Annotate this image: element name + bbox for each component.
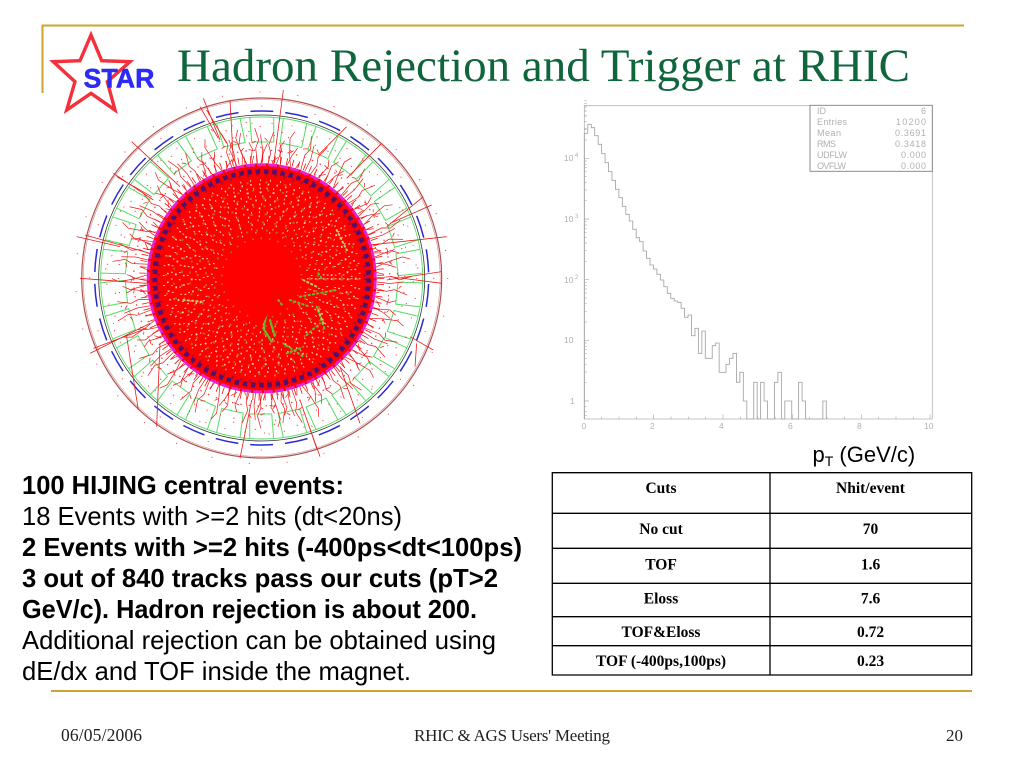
pT distribution step line <box>584 124 826 419</box>
table: cuts vs hits per event: Nhit/event <box>836 480 906 497</box>
table: cuts vs hits per event: Eloss <box>644 590 678 608</box>
table: cuts vs hits per event: TOF <box>645 556 677 574</box>
short tracks outside the disc <box>102 118 421 438</box>
header frame lines <box>42 26 964 93</box>
table: cuts vs hits per event: 1.6 <box>861 556 880 574</box>
statistics box: Mean <box>817 128 841 138</box>
y axis labels <box>564 153 579 406</box>
x axis labels <box>582 421 934 431</box>
magenta inner barrel <box>148 165 375 392</box>
text block: HIJING results <box>22 472 522 686</box>
x axis labels: 10 <box>924 421 934 431</box>
scattered hit dots <box>76 92 448 464</box>
icon: STAR logo <box>53 35 154 110</box>
statistics box: OVFLW <box>817 161 846 171</box>
blue dots ring <box>148 165 375 392</box>
table: cuts vs hits per event: 0.23 <box>857 653 884 670</box>
axis title pT: (GeV/c) <box>833 442 915 467</box>
statistics box: 0.000 <box>901 161 926 171</box>
table: cuts vs hits per event: TOF&Eloss <box>622 624 700 641</box>
text block: HIJING results: 3 out of 840 tracks pass our cuts (pT>2 <box>22 565 498 593</box>
axis title pT: p <box>812 442 825 467</box>
page number: 20 <box>946 726 963 745</box>
axes frame <box>584 106 932 419</box>
statistics box: 0.3691 <box>895 128 926 138</box>
green hit patches <box>183 230 347 357</box>
dense central core <box>241 245 289 325</box>
y axis labels: 10 <box>564 275 574 285</box>
axis title pT: T <box>825 453 834 469</box>
y axis labels: 4 <box>575 153 579 159</box>
statistics box: 6 <box>921 106 926 116</box>
y axis ticks <box>584 100 589 416</box>
table: cuts vs hits per event: No cut <box>639 521 684 538</box>
x axis labels: 4 <box>719 421 724 431</box>
statistics box <box>810 105 932 171</box>
outer magnet rings <box>82 98 442 458</box>
y axis labels: 2 <box>575 275 579 281</box>
title: Hadron Rejection and Trigger at RHIC <box>177 40 910 92</box>
long tracks crossing the rings <box>77 90 447 458</box>
y axis labels: 10 <box>564 153 574 163</box>
x axis labels: 8 <box>857 421 862 431</box>
blue segments <box>95 111 429 445</box>
footer meeting name: RHIC & AGS Users' Meeting <box>414 726 610 745</box>
table: cuts vs hits per event: Cuts <box>645 480 677 497</box>
text block: HIJING results: 2 Events with >=2 hits (-400ps<dt<100ps) <box>22 534 522 562</box>
olive hit specks <box>166 182 358 374</box>
footer date: 06/05/2006 <box>61 725 142 745</box>
table: cuts vs hits per event: 70 <box>863 521 878 538</box>
table: cuts vs hits per event: TOF (-400ps,100ps) <box>596 653 726 670</box>
text block: HIJING results: GeV/c). Hadron rejection is about 200. <box>22 596 477 624</box>
y axis labels: 1 <box>570 396 575 406</box>
x axis labels: 0 <box>582 421 586 431</box>
footer rule <box>51 690 972 692</box>
detector event display <box>76 90 448 464</box>
table: cuts vs hits per event: 0.72 <box>857 624 884 641</box>
text block: HIJING results: Additional rejection can be obtained using <box>22 627 496 655</box>
statistics box: 0.3418 <box>895 139 926 149</box>
icon: STAR logo: STAR <box>84 64 154 94</box>
statistics box: UDFLW <box>817 150 848 160</box>
text block: HIJING results: 100 HIJING central events: <box>22 472 344 500</box>
y axis labels: 10 <box>564 335 574 345</box>
speckled inner track region <box>164 180 360 376</box>
table: cuts vs hits per event: 7.6 <box>861 590 880 608</box>
text block: HIJING results: dE/dx and TOF inside the magnet. <box>22 658 411 686</box>
text block: HIJING results: 18 Events with >=2 hits (dt<20ns) <box>22 503 402 531</box>
x axis ticks <box>584 414 930 419</box>
x axis labels: 2 <box>650 421 655 431</box>
x axis labels: 6 <box>788 421 793 431</box>
green detector modules <box>100 117 423 439</box>
histogram <box>584 100 932 419</box>
y axis labels: 10 <box>564 214 574 224</box>
table: cuts vs hits per event <box>552 473 972 675</box>
statistics box: 0.000 <box>901 150 926 160</box>
statistics box: 10200 <box>896 117 926 127</box>
statistics box: RMS <box>817 139 836 149</box>
y axis labels: 3 <box>575 214 579 220</box>
statistics box: ID <box>817 106 827 116</box>
statistics box: Entries <box>817 117 848 127</box>
